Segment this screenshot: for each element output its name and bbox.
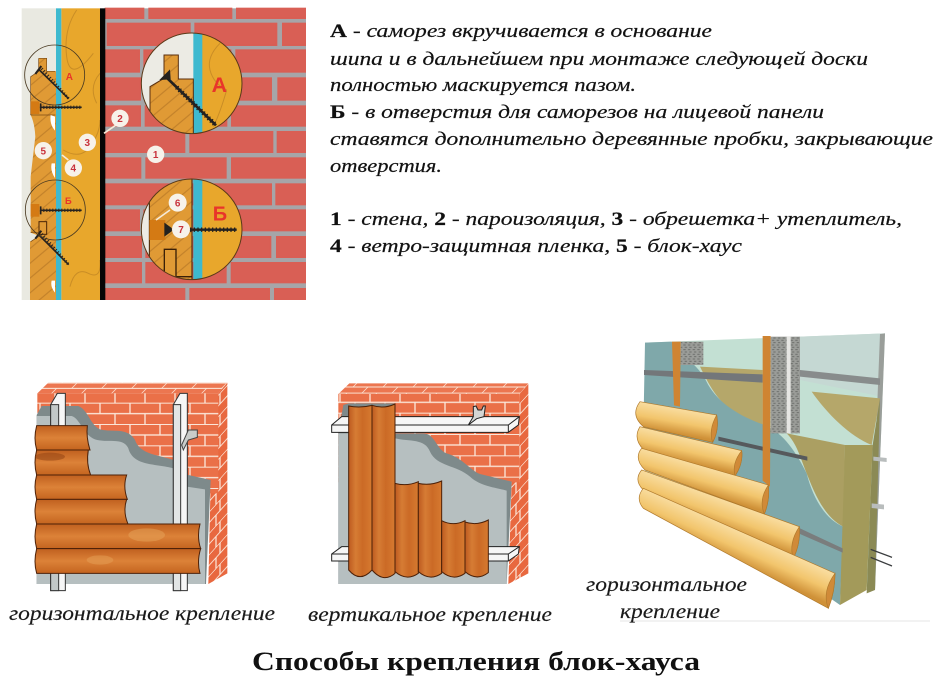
number bubbles: 2 bbox=[117, 114, 123, 125]
number bubbles: 6 bbox=[175, 198, 181, 209]
number bubbles: 5 bbox=[41, 146, 47, 157]
explanatory text: Б - в отверстия для саморезов на лицевой панели bbox=[330, 102, 824, 123]
vertical rails bbox=[51, 393, 197, 591]
metal profiles and rails bbox=[644, 337, 892, 566]
wooden boards bbox=[35, 426, 201, 573]
caption: vertical mounting: вертикальное крепление bbox=[308, 602, 552, 626]
magnified circle A: А bbox=[212, 73, 227, 97]
brick block and insulation bbox=[338, 383, 528, 584]
explanatory text: отверстия. bbox=[330, 156, 442, 177]
small circle Б bbox=[25, 180, 85, 240]
explanatory text: 1 - стена, 2 - пароизоляция, 3 - обрешетка+ утеплитель, bbox=[330, 209, 902, 230]
logs bbox=[636, 402, 835, 608]
magnified circle Б bbox=[140, 178, 243, 282]
explanatory text: шипа и в дальнейшем при монтаже следующей доски bbox=[330, 49, 868, 70]
small circle Б: Б bbox=[65, 196, 72, 206]
caption: horizontal mounting, log siding bbox=[586, 572, 747, 623]
illustration: log-siding wall layers bbox=[636, 333, 892, 608]
block house boards bbox=[30, 58, 56, 300]
explanatory text: А - саморез вкручивается в основание bbox=[330, 21, 712, 42]
title: Способы крепления блок-хауса bbox=[252, 647, 700, 676]
wall layers bbox=[643, 333, 885, 605]
small circle A bbox=[25, 45, 85, 105]
caption: horizontal mounting: горизонтальное крепление bbox=[9, 601, 275, 625]
number bubbles: 1 bbox=[153, 150, 159, 161]
brick block and insulation bbox=[37, 383, 227, 584]
caption: horizontal mounting, log siding: крепление bbox=[620, 599, 720, 623]
number bubbles: 7 bbox=[178, 225, 184, 236]
magnified circle Б: Б bbox=[213, 204, 227, 226]
explanatory text: 4 - ветро-защитная пленка, 5 - блок-хаус bbox=[330, 236, 743, 257]
panel: wall section diagram bbox=[22, 8, 306, 300]
brick wall bbox=[105, 8, 306, 300]
wooden battens bbox=[672, 336, 771, 487]
small circle A: А bbox=[66, 72, 73, 83]
explanatory text: ставятся дополнительно деревянные пробки, закрывающие bbox=[330, 129, 933, 150]
number bubbles: 4 bbox=[71, 164, 77, 175]
number bubbles: 3 bbox=[85, 138, 91, 149]
explanatory text bbox=[330, 21, 933, 257]
explanatory text: полностью маскируется пазом. bbox=[330, 75, 636, 96]
caption: horizontal mounting, log siding: горизонтальное bbox=[586, 572, 747, 596]
wooden boards bbox=[349, 404, 488, 578]
horizontal rails bbox=[332, 406, 519, 561]
layers: gap, vapor film, batten, black barrier bbox=[22, 8, 105, 300]
illustration: vertical mounting, brick wall bbox=[332, 383, 528, 584]
illustration: horizontal mounting, brick wall bbox=[35, 383, 227, 591]
screws on section bbox=[35, 66, 82, 265]
number bubbles bbox=[35, 110, 190, 238]
magnified circle A bbox=[140, 32, 243, 135]
